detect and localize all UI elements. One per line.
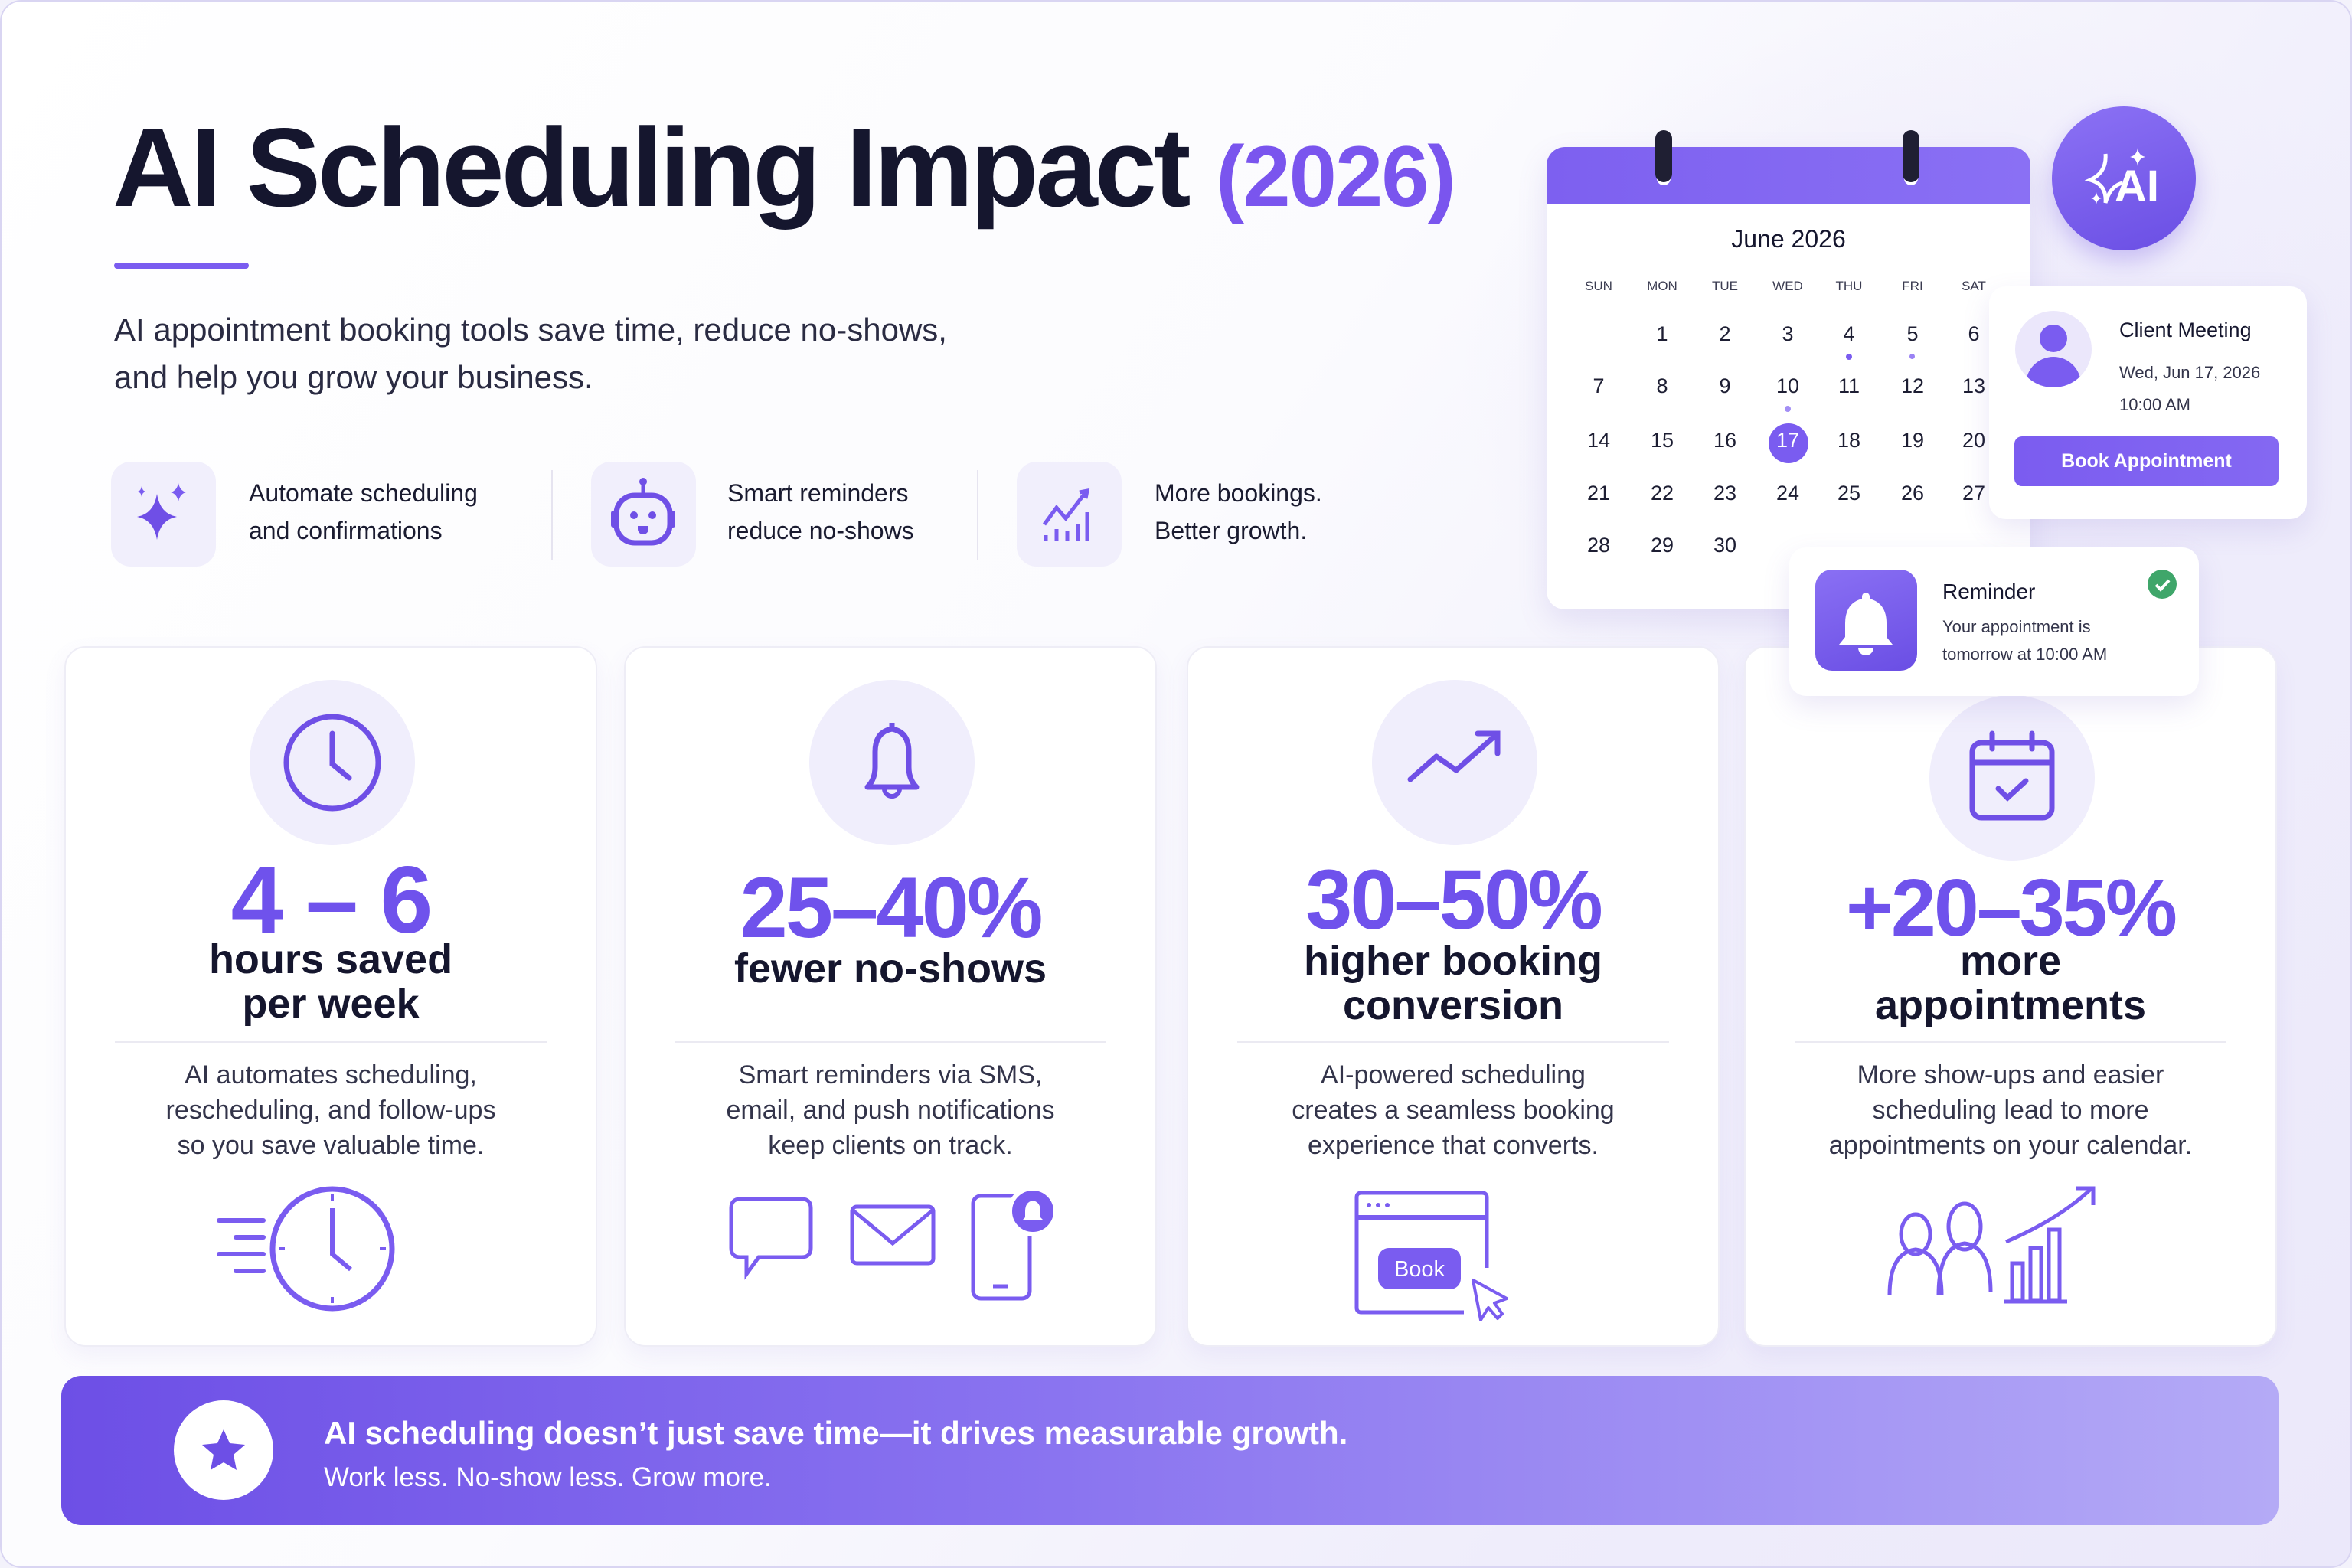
card: client meeting: Wed, Jun 17, 2026 — [2119, 363, 2260, 382]
calendar widget: 9 — [1719, 374, 1731, 397]
panel: fewer no-shows: fewer no-shows — [734, 946, 1047, 991]
card: reminder: Reminder — [1942, 580, 2035, 603]
decorative background shape — [1456, 2, 2352, 767]
icon: fast clock — [217, 1187, 395, 1311]
panel: booking conversion: experience that converts. — [1308, 1131, 1599, 1160]
icon: book button browser — [1355, 1191, 1508, 1321]
panel: fewer no-shows — [624, 646, 1157, 1347]
calendar widget: 21 — [1587, 482, 1610, 505]
panel: more appointments: more — [1960, 938, 2061, 984]
calendar widget: SAT — [1962, 279, 1986, 293]
panel: booking conversion: conversion — [1343, 982, 1563, 1028]
feature: smart reminders — [591, 462, 914, 567]
calendar widget — [1541, 130, 2036, 627]
calendar widget: 28 — [1587, 534, 1610, 557]
calendar widget: THU — [1836, 279, 1862, 293]
banner: Work less. No-show less. Grow more. — [324, 1462, 772, 1492]
panel: fewer no-shows: keep clients on track. — [768, 1131, 1013, 1160]
subtitle: AI appointment booking tools save time, reduce no-shows, — [114, 312, 947, 348]
calendar widget: FRI — [1902, 279, 1923, 293]
panel: more appointments: appointments on your calendar. — [1829, 1131, 2192, 1160]
feature: automate: and confirmations — [249, 517, 443, 544]
button — [2014, 436, 2278, 486]
card: reminder: tomorrow at 10:00 AM — [1942, 645, 2107, 664]
calendar widget: 19 — [1901, 429, 1924, 452]
calendar widget: MON — [1647, 279, 1677, 293]
panel: more appointments: More show-ups and easier — [1857, 1060, 2164, 1089]
feature: automate — [111, 462, 478, 567]
panel: fewer no-shows: 25–40% — [740, 860, 1041, 956]
calendar widget: 23 — [1713, 482, 1736, 505]
title: AI Scheduling Impact (2026) — [113, 105, 1455, 230]
calendar widget: 2 — [1719, 322, 1731, 345]
calendar widget: 29 — [1651, 534, 1674, 557]
panel: more appointments: +20–35% — [1846, 863, 2175, 953]
calendar widget: 24 — [1776, 482, 1799, 505]
panel: hours saved — [64, 646, 597, 1347]
subtitle — [114, 312, 947, 395]
calendar widget: 22 — [1651, 482, 1674, 505]
icon: trend arrow — [1372, 680, 1537, 845]
icon: clock — [250, 680, 415, 845]
icon: book button browser: Book — [1394, 1257, 1446, 1282]
panel: more appointments: scheduling lead to more — [1872, 1096, 2148, 1125]
panel: fewer no-shows: Smart reminders via SMS, — [739, 1060, 1042, 1089]
panel: booking conversion: creates a seamless booking — [1292, 1096, 1615, 1125]
feature: more bookings: Better growth. — [1155, 517, 1307, 544]
calendar widget: 5 — [1906, 322, 1919, 345]
calendar widget: 13 — [1962, 374, 1985, 397]
calendar widget: 12 — [1901, 374, 1924, 397]
calendar widget: WED — [1772, 279, 1803, 293]
panel: hours saved: hours saved — [209, 936, 452, 982]
panel: booking conversion: AI-powered scheduling — [1321, 1060, 1586, 1089]
calendar widget: 16 — [1713, 429, 1736, 452]
calendar widget: 6 — [1968, 322, 1980, 345]
calendar widget: 14 — [1587, 429, 1610, 452]
calendar widget: 25 — [1838, 482, 1860, 505]
panel: hours saved: AI automates scheduling, — [185, 1060, 477, 1089]
calendar widget: 7 — [1592, 374, 1605, 397]
calendar widget: 8 — [1656, 374, 1668, 397]
subtitle: and help you grow your business. — [114, 359, 593, 395]
panel: booking conversion: higher booking — [1304, 938, 1602, 984]
title underline — [114, 263, 249, 269]
card: client meeting: Client Meeting — [2119, 318, 2252, 341]
icon: robot — [591, 462, 696, 567]
calendar widget: June 2026 — [1731, 225, 1846, 253]
calendar widget: 17 — [1776, 429, 1799, 452]
icon: bell — [1815, 570, 1917, 671]
icon: people growth — [1888, 1187, 2095, 1303]
icon: bell — [809, 680, 975, 845]
icon: calendar check — [1929, 695, 2095, 861]
icon: growth chart — [1017, 462, 1122, 567]
panel: fewer no-shows: email, and push notifications — [726, 1096, 1055, 1125]
icons: chat, email, phone — [729, 1191, 1054, 1300]
icon: sparkles — [111, 462, 216, 567]
panel: booking conversion — [1187, 646, 1720, 1347]
AI badge — [2052, 106, 2196, 250]
calendar widget: 11 — [1838, 374, 1860, 397]
feature: more bookings: More bookings. — [1155, 479, 1322, 507]
panel: booking conversion: 30–50% — [1305, 853, 1601, 947]
calendar widget: 27 — [1962, 482, 1985, 505]
calendar widget: 26 — [1901, 482, 1924, 505]
calendar widget: 10 — [1776, 374, 1799, 397]
panel: hours saved: per week — [242, 981, 420, 1027]
banner — [61, 1376, 2278, 1525]
avatar — [2015, 311, 2092, 387]
panel: hours saved: 4 – 6 — [231, 848, 430, 953]
calendar widget: 30 — [1713, 534, 1736, 557]
banner text: AI scheduling doesn’t just save time—it drives measurable growth. — [324, 1415, 1348, 1451]
card: reminder — [1789, 547, 2199, 696]
panel: more appointments — [1744, 646, 2277, 1347]
calendar widget: 1 — [1656, 322, 1668, 345]
feature: smart reminders: reduce no-shows — [727, 517, 914, 544]
feature: more bookings — [1017, 462, 1322, 567]
panel: more appointments: appointments — [1875, 982, 2146, 1028]
calendar widget: SUN — [1585, 279, 1612, 293]
calendar widget: 18 — [1838, 429, 1860, 452]
calendar widget: TUE — [1712, 279, 1738, 293]
calendar widget: 20 — [1962, 429, 1985, 452]
card: client meeting: 10:00 AM — [2119, 395, 2190, 414]
AI badge: AI — [2115, 162, 2159, 211]
panel: hours saved: rescheduling, and follow-ups — [166, 1096, 495, 1125]
icon: star — [174, 1400, 273, 1500]
panel: hours saved: so you save valuable time. — [178, 1131, 484, 1160]
card: reminder: Your appointment is — [1942, 617, 2091, 636]
button: Book Appointment — [2061, 450, 2232, 472]
card: client meeting — [1989, 286, 2307, 519]
feature: smart reminders: Smart reminders — [727, 479, 908, 507]
calendar widget: 3 — [1782, 322, 1794, 345]
calendar widget: 15 — [1651, 429, 1674, 452]
feature: automate: Automate scheduling — [249, 479, 478, 507]
calendar widget: 4 — [1843, 322, 1855, 345]
icon: check — [2148, 570, 2177, 599]
